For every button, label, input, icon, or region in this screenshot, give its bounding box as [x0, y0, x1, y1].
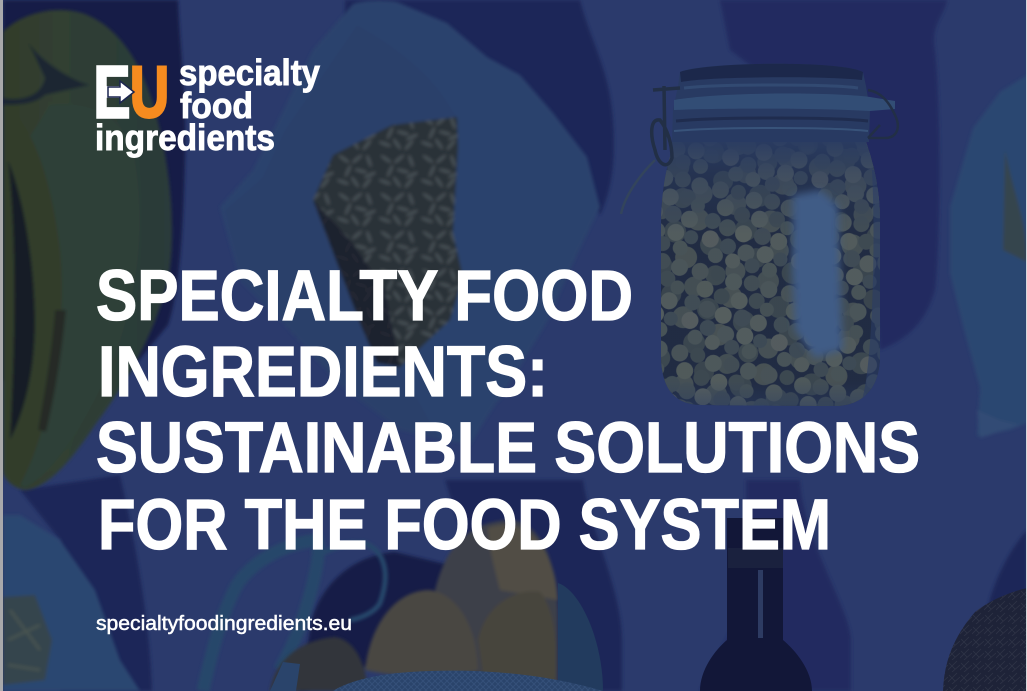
photo: net bag with bread [203, 520, 603, 691]
logo wordmark: specialty [179, 52, 320, 93]
photo: dark bottle [700, 518, 812, 691]
logo arrow [108, 81, 134, 103]
jar clasp [621, 86, 898, 214]
photo: glass jar of chickpeas [621, 64, 898, 408]
scan edges [0, 0, 3, 691]
logo: EU specialty food ingredients [94, 52, 320, 158]
net bag rim [558, 583, 603, 691]
website url: specialtyfoodingredients.eu [96, 613, 352, 635]
logo wordmark: ingredients [95, 117, 275, 158]
logo letter U: U [130, 53, 169, 133]
rice opening [313, 117, 463, 367]
photo: cloth bag with rice [220, 1, 600, 445]
jar lid [672, 64, 870, 142]
logo wordmark: food [180, 85, 253, 126]
logo wordmark [95, 52, 320, 158]
title [96, 257, 920, 565]
photo: cloth bag right [950, 75, 1027, 438]
photo: cloth bag bottom left [3, 515, 140, 691]
title: INGREDIENTS: [98, 333, 548, 412]
title: SUSTAINABLE SOLUTIONS [96, 409, 920, 488]
photo: bananas [3, 10, 172, 490]
title: SPECIALTY FOOD [96, 257, 633, 336]
logo letter E: E [94, 53, 130, 133]
photo: coconut [943, 588, 1027, 691]
title: FOR THE FOOD SYSTEM [98, 486, 831, 565]
bread loaves [270, 520, 558, 691]
